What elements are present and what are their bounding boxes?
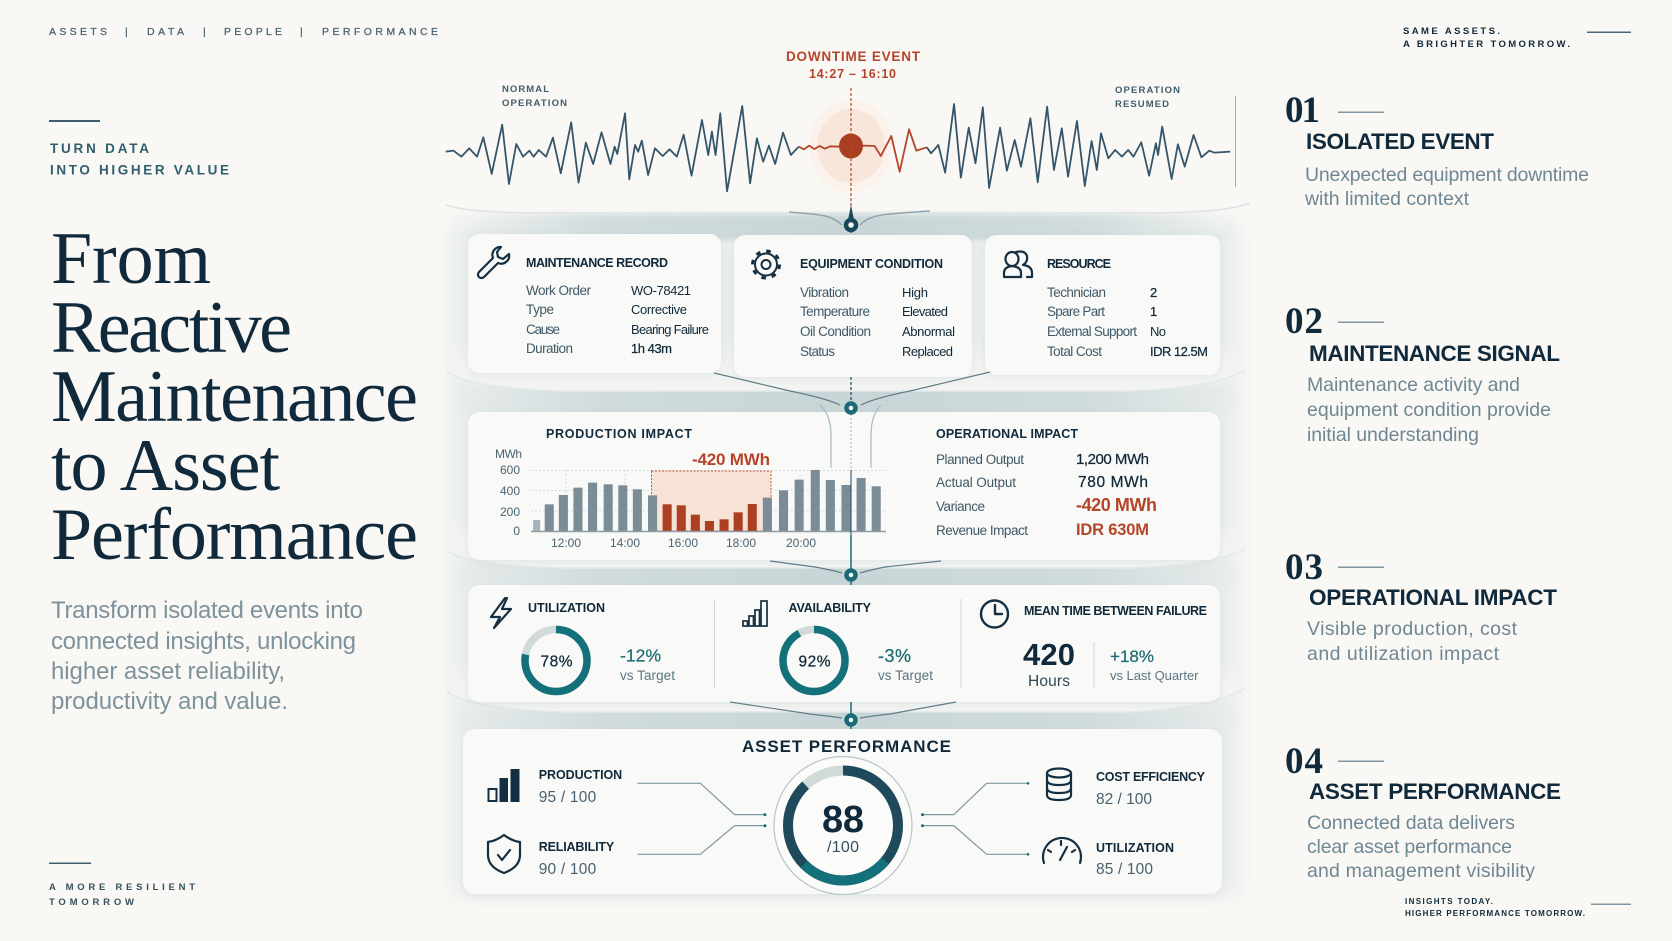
bar chart: production: 400: [500, 484, 520, 498]
panel: asset performance: [463, 729, 1222, 894]
title: Reactive: [51, 287, 292, 369]
header navigation strip: DATA: [147, 26, 184, 38]
step 02: maintenance signal: 02: [1285, 301, 1323, 342]
step 02: maintenance signal: [1285, 301, 1560, 446]
subtitle: connected insights, unlocking: [51, 628, 356, 655]
title: Maintenance: [51, 356, 418, 438]
table: maintenance record: 1h 43m: [631, 341, 672, 356]
connector end dots: [764, 782, 1029, 856]
kpi: availability: AVAILABILITY: [788, 601, 872, 615]
kpi: availability: 92%: [798, 654, 831, 670]
table: maintenance record: WO-78421: [631, 283, 691, 298]
subtitle: productivity and value.: [51, 688, 288, 715]
connector: waveform to records: [789, 205, 930, 245]
step 01: isolated event: [1285, 90, 1589, 210]
table: maintenance record: Bearing Failure: [631, 322, 709, 337]
kpi: mean time between failure: Hours: [1028, 673, 1070, 690]
table: resource: External Support: [1047, 324, 1137, 339]
table: operational impact: Actual Output: [936, 475, 1016, 490]
table: equipment condition: High: [902, 285, 928, 300]
step 03: operational impact: [1285, 547, 1557, 665]
metric: production: [539, 768, 622, 806]
operation resumed label: [1115, 85, 1236, 187]
step 03: operational impact: Visible production, cost: [1307, 618, 1518, 640]
backdrop shading behind the panels: [420, 190, 1260, 897]
connector: KPI to asset performance: [730, 702, 956, 735]
tagline: turn data into higher value: INTO HIGHER VALUE: [50, 162, 229, 178]
downtime event label: [786, 49, 921, 81]
kpi: utilization: vs Target: [620, 668, 675, 683]
metric: production: PRODUCTION: [539, 768, 622, 782]
step 04: asset performance: 04: [1285, 741, 1323, 782]
table: resource: Spare Part: [1047, 304, 1105, 319]
panel: production and operational impact: [468, 412, 1220, 560]
kpi: utilization: UTILIZATION: [528, 601, 605, 615]
step 03: operational impact: OPERATIONAL IMPACT: [1309, 585, 1557, 610]
metric: reliability: 90 / 100: [539, 861, 597, 878]
table: equipment condition: Temperature: [800, 304, 870, 319]
kpi: availability: [783, 601, 933, 692]
bar chart: production: 14:00: [610, 536, 640, 550]
table: resource: Technician: [1047, 285, 1106, 300]
table: resource: 2: [1150, 285, 1157, 300]
heading: operational impact: OPERATIONAL IMPACT: [936, 427, 1078, 441]
operation resumed label: OPERATION: [1115, 85, 1180, 96]
step 03: operational impact: 03: [1285, 547, 1323, 588]
heading: resource: RESOURCE: [1047, 257, 1111, 271]
icon: wrench: [478, 247, 509, 278]
icon: speedometer: [1043, 838, 1081, 863]
heading: asset performance: ASSET PERFORMANCE: [742, 737, 951, 756]
gauge: overall score 88 of 100: 88: [822, 799, 864, 841]
step 01: isolated event: 01: [1285, 90, 1320, 131]
icon: database: [1047, 768, 1071, 800]
bar chart: production: MWh: [495, 447, 522, 461]
metric: reliability: [539, 840, 615, 878]
subtitle: Transform isolated events into: [51, 597, 363, 624]
operation resumed label: RESUMED: [1115, 99, 1169, 110]
donut: 92 percent: [783, 630, 845, 692]
kpi: availability: -3%: [878, 646, 911, 666]
callout: variance: -420 MWh: [692, 450, 770, 469]
step 04: asset performance: Connected data delivers: [1307, 812, 1515, 834]
gauge: overall score 88 of 100: /100: [827, 839, 859, 856]
connector: records to impact: [714, 372, 990, 535]
table: equipment condition: Abnormal: [902, 324, 955, 339]
panel: equipment condition: [734, 235, 972, 377]
icon: lightning bolt: [491, 598, 511, 628]
metric: cost efficiency: 82 / 100: [1096, 791, 1152, 808]
header navigation strip: [49, 26, 438, 38]
bar chart: production: [495, 447, 886, 550]
gauge: overall score 88 of 100: [774, 756, 912, 894]
table: operational impact: IDR 630M: [1076, 521, 1149, 539]
kpi: mean time between failure: vs Last Quarter: [1110, 668, 1199, 683]
highlight: downtime window: [652, 471, 771, 531]
kpi: utilization: -12%: [620, 646, 661, 666]
header navigation strip: PERFORMANCE: [322, 26, 438, 38]
table: equipment condition: Oil Condition: [800, 324, 871, 339]
footer note right: HIGHER PERFORMANCE TOMORROW.: [1405, 909, 1585, 918]
title: [51, 218, 418, 576]
heading: production impact: PRODUCTION IMPACT: [546, 427, 692, 441]
normal operation label: [502, 84, 567, 109]
step 02: maintenance signal: MAINTENANCE SIGNAL: [1309, 341, 1560, 366]
header navigation strip: PEOPLE: [224, 26, 282, 38]
panel: maintenance record: [468, 234, 721, 373]
table: equipment condition: Status: [800, 344, 835, 359]
table: operational impact: 780 MWh: [1078, 474, 1148, 491]
header navigation strip: |: [300, 26, 303, 38]
metric: reliability: RELIABILITY: [539, 840, 615, 854]
step 01: isolated event: with limited context: [1304, 188, 1470, 210]
bar chart: production: 16:00: [668, 536, 698, 550]
icon: gear: [752, 251, 780, 278]
title: From: [51, 218, 211, 300]
subtitle: [51, 597, 363, 715]
step 03: operational impact: and utilization impact: [1307, 643, 1500, 665]
metric: cost efficiency: [1096, 770, 1206, 808]
footer note right: [1405, 897, 1631, 918]
connector: impact to KPI: [770, 535, 941, 590]
kpi: mean time between failure: MEAN TIME BETWEEN FAILURE: [1024, 604, 1207, 618]
metric: cost efficiency: COST EFFICIENCY: [1096, 770, 1206, 784]
table: maintenance record: Duration: [526, 341, 573, 356]
table: equipment condition: Vibration: [800, 285, 849, 300]
connectors: metrics to score: [637, 783, 1028, 854]
kpi: mean time between failure: [1023, 604, 1207, 690]
kpi: availability: vs Target: [878, 668, 933, 683]
kpi: utilization: 78%: [540, 654, 573, 670]
header navigation strip: |: [125, 26, 128, 38]
bar chart: production: 0: [513, 524, 520, 538]
downtime event label: DOWNTIME EVENT: [786, 49, 921, 64]
step 02: maintenance signal: equipment condition provide: [1307, 399, 1551, 421]
panel: KPI strip: [468, 585, 1220, 702]
table: maintenance record: Cause: [526, 322, 560, 337]
kpi: mean time between failure: +18%: [1110, 647, 1154, 666]
metric: utilization: [1096, 841, 1174, 878]
table: operational impact: Planned Output: [936, 452, 1024, 467]
table: operational impact: -420 MWh: [1076, 495, 1157, 515]
footer note left: [49, 862, 195, 908]
step 02: maintenance signal: initial understanding: [1307, 424, 1479, 446]
normal operation label: OPERATION: [502, 98, 567, 109]
icon: shield: [488, 835, 520, 873]
table: equipment condition: Replaced: [902, 344, 953, 359]
waveform: normal operation: [446, 106, 799, 191]
footer note left: A MORE RESILIENT: [49, 882, 195, 893]
waveform: downtime segment: [799, 129, 927, 172]
donut: 78 percent: [525, 630, 587, 692]
table: equipment condition: [800, 285, 955, 359]
metric: utilization: UTILIZATION: [1096, 841, 1174, 855]
table: resource: IDR 12.5M: [1150, 344, 1208, 359]
icon: signal bars: [743, 601, 767, 626]
table: maintenance record: Type: [526, 302, 554, 317]
bars: [533, 470, 881, 531]
icon: people: [1004, 252, 1032, 277]
panel: resource: [985, 235, 1220, 375]
title: Performance: [51, 494, 418, 576]
step 04: asset performance: [1285, 741, 1561, 882]
title: to Asset: [51, 425, 280, 507]
bar chart: production: 20:00: [786, 536, 816, 550]
step 04: asset performance: ASSET PERFORMANCE: [1309, 779, 1561, 804]
downtime event label: 14:27 – 16:10: [809, 67, 896, 81]
tagline: turn data into higher value: TURN DATA: [50, 141, 149, 156]
table: maintenance record: Work Order: [526, 283, 592, 298]
bar chart: production: 600: [500, 463, 520, 477]
bar chart: production: 200: [500, 505, 520, 519]
downtime pulse marker: [839, 88, 863, 207]
footer note left: TOMORROW: [49, 897, 134, 908]
icon: clock: [981, 600, 1008, 628]
step 02: maintenance signal: Maintenance activity and: [1307, 374, 1520, 396]
header navigation strip: |: [203, 26, 206, 38]
header note right: A BRIGHTER TOMORROW.: [1403, 39, 1570, 50]
header navigation strip: ASSETS: [49, 26, 107, 38]
header note right: [1403, 26, 1631, 50]
step 01: isolated event: Unexpected equipment downtime: [1305, 164, 1589, 186]
step 04: asset performance: and management visibility: [1307, 860, 1535, 882]
table: maintenance record: [526, 283, 709, 356]
header note right: SAME ASSETS.: [1403, 26, 1500, 37]
subtitle: higher asset reliability,: [51, 658, 285, 685]
table: equipment condition: Elevated: [902, 304, 948, 319]
waveform: operation resumed: [927, 104, 1230, 188]
table: operational impact: Revenue Impact: [936, 523, 1028, 538]
bar chart: production: 12:00: [551, 536, 581, 550]
metric: production: 95 / 100: [539, 789, 597, 806]
heading: equipment condition: EQUIPMENT CONDITION: [800, 257, 943, 271]
table: operational impact: [936, 451, 1157, 539]
bar chart: production: 18:00: [726, 536, 756, 550]
kpi: utilization: [525, 601, 675, 692]
step 04: asset performance: clear asset performance: [1307, 836, 1512, 858]
table: maintenance record: Corrective: [631, 302, 687, 317]
icon: production bars: [488, 769, 520, 802]
kpi: mean time between failure: 420: [1023, 637, 1075, 672]
tagline: turn data into higher value: [49, 120, 229, 178]
waveform chart: [446, 104, 1230, 191]
table: resource: [1047, 285, 1208, 359]
table: resource: Total Cost: [1047, 344, 1102, 359]
footer note right: INSIGHTS TODAY.: [1405, 897, 1493, 906]
table: operational impact: Variance: [936, 499, 985, 514]
table: resource: No: [1150, 324, 1166, 339]
downtime pulse halo: [809, 100, 893, 192]
step 01: isolated event: ISOLATED EVENT: [1306, 129, 1494, 154]
heading: maintenance record: MAINTENANCE RECORD: [526, 256, 668, 270]
table: resource: 1: [1150, 304, 1157, 319]
normal operation label: NORMAL: [502, 84, 549, 95]
table: operational impact: 1,200 MWh: [1076, 451, 1149, 468]
metric: utilization: 85 / 100: [1096, 861, 1153, 878]
